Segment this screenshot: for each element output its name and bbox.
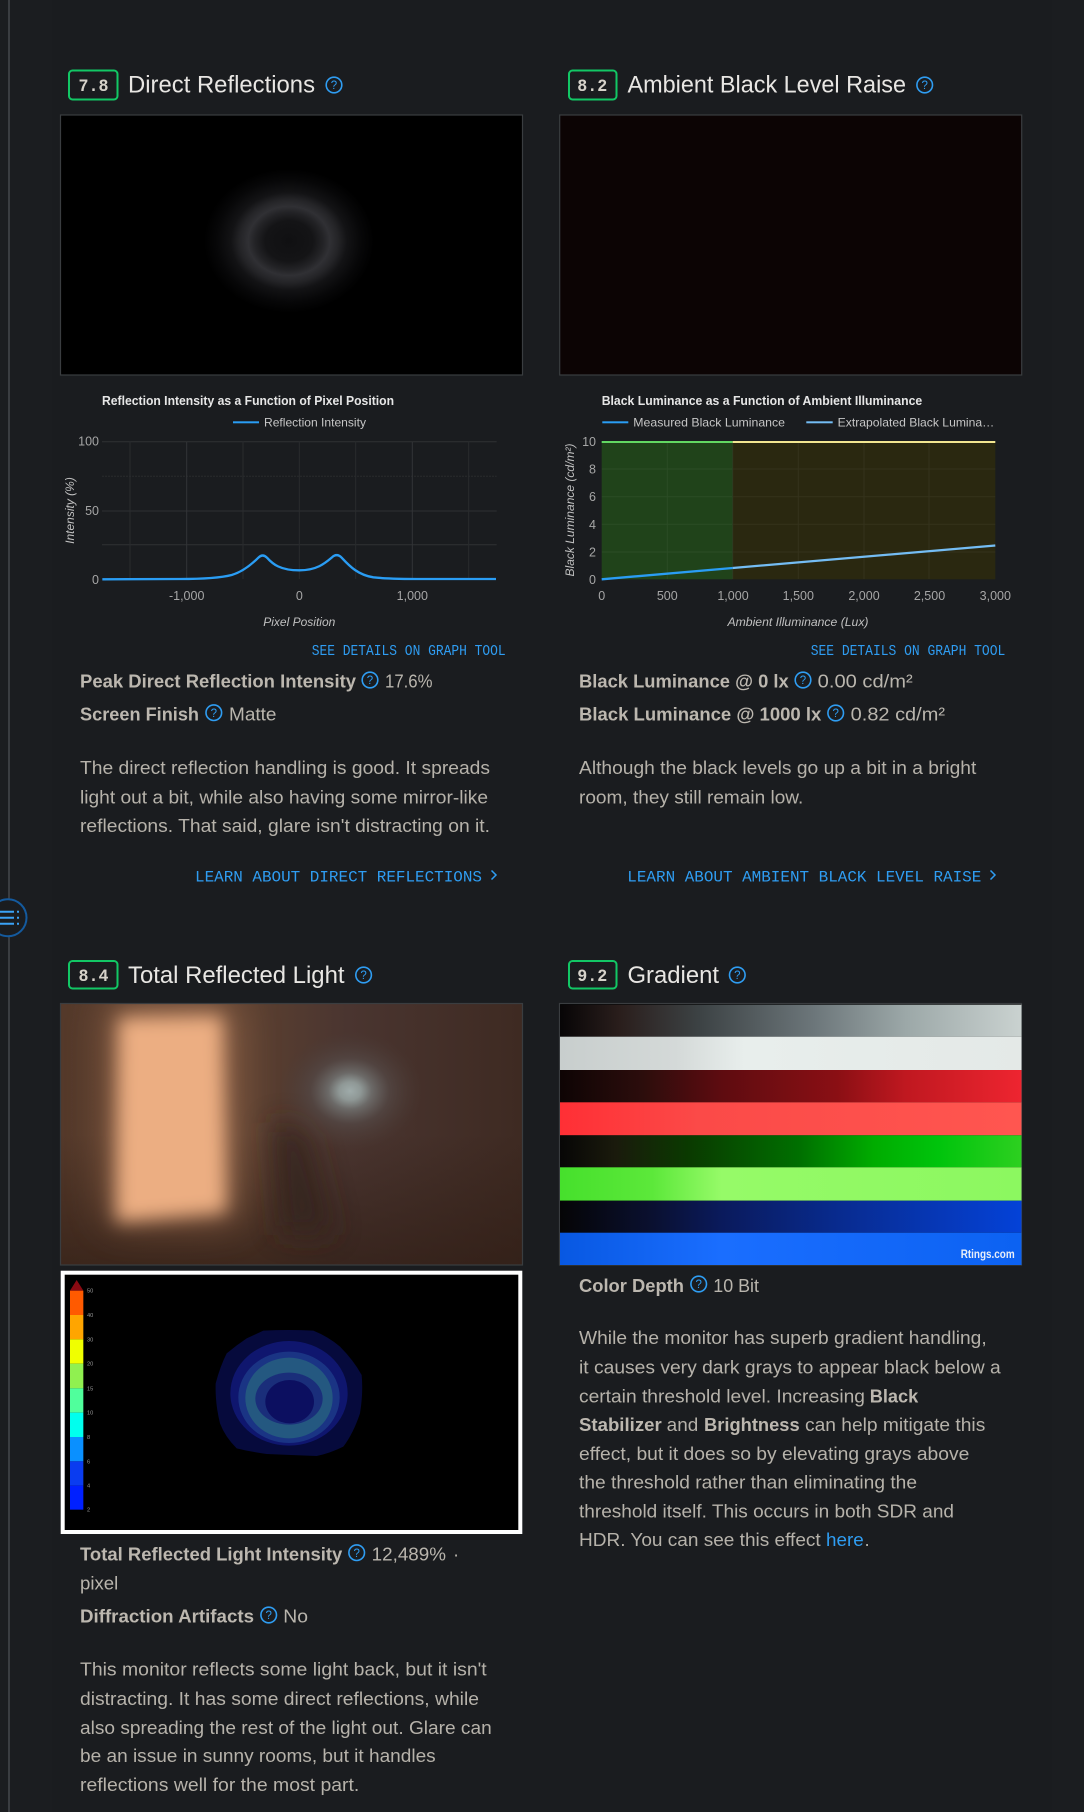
paragraph: total reflected light: This monitor reflects some light back, but it isn't — [80, 1659, 487, 1680]
score badge 9.2 — [569, 961, 616, 988]
stat: black luminance at 0 lx: ? — [800, 675, 806, 687]
panel: gradient — [560, 961, 1022, 1550]
icon: help — [917, 77, 932, 93]
score badge 7.8: 7.8 — [78, 77, 108, 97]
stat: total reflected light intensity — [80, 1544, 459, 1594]
total reflected light photo — [60, 1000, 522, 1265]
heat map contours — [216, 1330, 362, 1456]
stat: screen finish: Screen Finish — [80, 704, 199, 724]
x axis ticks: 3,000 — [980, 589, 1011, 603]
reflection intensity line — [102, 555, 496, 579]
panel: total reflected light — [60, 961, 522, 1795]
watermark: Rtings.com — [961, 1247, 1015, 1261]
stat: peak direct reflection intensity: 17.6% — [385, 670, 432, 692]
score badge 8.2 — [569, 70, 616, 100]
y axis ticks: 8 — [589, 462, 596, 476]
direct reflection photo — [60, 115, 522, 375]
y axis ticks: 0 — [92, 573, 99, 587]
link: learn about ambient black level raise: LEARN ABOUT AMBIENT BLACK LEVEL RAISE — [627, 868, 981, 886]
x axis ticks: 500 — [657, 589, 678, 603]
stat: screen finish — [80, 704, 276, 724]
stat: black luminance at 1000 lx: 0.82 cd/m² — [851, 704, 945, 724]
paragraph: total reflected light — [80, 1659, 492, 1795]
chart legend — [602, 416, 994, 430]
stat: black luminance at 0 lx — [579, 670, 913, 692]
paragraph: ambient black level: room, they still remain low. — [579, 786, 803, 807]
y axis ticks: 50 — [85, 504, 99, 518]
stat: black luminance at 0 lx: 0.00 cd/m² — [818, 670, 913, 692]
x axis ticks — [169, 589, 428, 603]
chart legend: Reflection Intensity — [264, 416, 366, 430]
chart title: Black Luminance as a Function of Ambient Illuminance — [602, 393, 922, 408]
heading: direct reflections — [69, 70, 342, 100]
paragraph: gradient: Black — [870, 1385, 919, 1406]
colour scale bar — [70, 1280, 83, 1510]
title text: Total Reflected Light — [128, 962, 345, 989]
paragraph: direct reflections: The direct reflection handling is good. It spreads — [80, 757, 490, 778]
score badge 8.4 — [69, 961, 118, 988]
paragraph: total reflected light: reflections well for the most part. — [80, 1774, 359, 1795]
y axis ticks: 10 — [582, 435, 596, 449]
y axis title: Intensity (%) — [63, 477, 77, 544]
x axis ticks: 2,000 — [848, 589, 880, 603]
stat: color depth: Color Depth — [579, 1275, 684, 1296]
paragraph: gradient: and — [667, 1414, 698, 1435]
colour scale labels: 10 — [87, 1411, 93, 1417]
paragraph: gradient: threshold itself. This occurs in both SDR and — [579, 1500, 954, 1521]
x axis title: Pixel Position — [263, 615, 336, 629]
heat map — [63, 1273, 520, 1532]
paragraph: gradient: Brightness — [704, 1414, 800, 1435]
x axis ticks: 1,000 — [397, 589, 428, 603]
panel: ambient black level raise — [560, 70, 1022, 886]
sidebar rail — [8, 0, 10, 1812]
stat: color depth: 10 Bit — [713, 1275, 759, 1296]
x axis ticks: 2,500 — [914, 589, 945, 603]
title text: Direct Reflections — [128, 72, 315, 98]
heading: ambient black level raise — [569, 70, 932, 100]
heading: gradient — [569, 961, 745, 989]
icon: help — [356, 967, 371, 983]
paragraph: direct reflections: reflections. That said, glare isn't distracting on it. — [80, 815, 490, 836]
stat: total reflected light intensity: pixel — [80, 1572, 118, 1594]
icon: table of contents menu button — [0, 899, 26, 936]
colour scale labels: 50 — [87, 1289, 93, 1295]
y axis title: Black Luminance (cd/m²) — [563, 444, 577, 576]
icon: help: ? — [331, 80, 337, 92]
panel: direct reflections — [60, 70, 522, 886]
paragraph: gradient — [579, 1327, 1001, 1550]
extrapolated line — [733, 546, 995, 568]
stat: screen finish: Matte — [229, 704, 276, 724]
paragraph: gradient: effect, but it does so by elevating grays above — [579, 1443, 969, 1464]
x axis ticks — [598, 589, 1011, 603]
colour scale labels: 8 — [87, 1435, 90, 1441]
ambient black photo — [560, 115, 1022, 375]
stat: black luminance at 1000 lx: ? — [832, 708, 839, 720]
paragraph: total reflected light: be an issue in sunny rooms, but it handles — [80, 1745, 436, 1766]
y axis ticks: 6 — [589, 490, 596, 504]
x axis title: Ambient Illuminance (Lux) — [726, 615, 868, 629]
paragraph: gradient: HDR. You can see this effect — [579, 1529, 821, 1550]
paragraph: gradient: it causes very dark grays to appear black below a — [579, 1356, 1001, 1377]
x axis ticks: 0 — [296, 589, 303, 603]
stat: color depth: ? — [695, 1279, 702, 1291]
y axis ticks — [582, 435, 596, 587]
paragraph: gradient: While the monitor has superb gradient handling, — [579, 1327, 987, 1348]
link: learn about direct reflections: LEARN ABOUT DIRECT REFLECTIONS — [195, 868, 482, 886]
link: see details on graph tool: SEE DETAILS ON GRAPH TOOL — [312, 644, 506, 660]
stat: peak direct reflection intensity: ? — [367, 675, 373, 687]
paragraph: ambient black level — [579, 757, 976, 807]
y axis ticks: 2 — [589, 546, 596, 560]
colour scale labels: 4 — [87, 1484, 90, 1490]
paragraph: ambient black level: Although the black levels go up a bit in a bright — [579, 757, 976, 778]
stat: total reflected light intensity: · — [453, 1544, 459, 1564]
chart title: Reflection Intensity as a Function of Pixel Position — [102, 393, 394, 408]
score badge 7.8 — [69, 70, 118, 100]
line chart: reflection intensity — [63, 393, 497, 629]
stat: black luminance at 1000 lx: Black Luminance @ 1000 lx — [579, 704, 822, 724]
icon: help — [730, 967, 745, 983]
score badge 9.2: 9.2 — [577, 967, 607, 987]
colour scale labels: 6 — [87, 1459, 90, 1465]
chart legend: Measured Black Luminance — [633, 416, 785, 430]
y axis ticks: 0 — [589, 573, 596, 587]
paragraph: gradient: . — [864, 1529, 870, 1550]
warning zone — [733, 442, 995, 579]
stat: diffraction artifacts: Diffraction Artifacts — [80, 1606, 254, 1626]
title text: Gradient — [628, 962, 719, 989]
icon: help: ? — [921, 80, 928, 92]
stat: diffraction artifacts: No — [283, 1606, 308, 1626]
link: see details on graph tool: SEE DETAILS ON GRAPH TOOL — [811, 644, 1005, 660]
colour scale labels: 20 — [87, 1362, 93, 1368]
stat: screen finish: ? — [211, 708, 217, 720]
stat: total reflected light intensity: Total Reflected Light Intensity — [80, 1544, 343, 1564]
line chart: black luminance — [563, 393, 1011, 629]
paragraph: gradient: here — [826, 1529, 864, 1550]
paragraph: gradient: Stabilizer — [579, 1414, 662, 1435]
stat: color depth — [579, 1275, 759, 1296]
icon: help: ? — [360, 970, 367, 982]
measured line — [602, 568, 733, 579]
colour scale labels — [87, 1289, 93, 1514]
score badge 8.2: 8.2 — [577, 77, 607, 97]
stat: diffraction artifacts: ? — [265, 1610, 272, 1622]
x axis ticks: -1,000 — [169, 589, 204, 603]
paragraph: direct reflections: light out a bit, while also having some mirror-like — [80, 786, 488, 807]
stat: peak direct reflection intensity: Peak Direct Reflection Intensity — [80, 670, 357, 692]
chart legend: Extrapolated Black Lumina… — [838, 416, 994, 430]
icon: help — [326, 77, 342, 93]
heading: total reflected light — [69, 961, 371, 989]
gradient test photo — [560, 1004, 1022, 1265]
x axis ticks: 0 — [598, 589, 605, 603]
colour scale labels: 30 — [87, 1337, 93, 1343]
stat: black luminance at 1000 lx — [579, 704, 945, 724]
y axis ticks: 4 — [589, 518, 596, 532]
colour scale labels: 15 — [87, 1386, 93, 1392]
good zone — [602, 442, 733, 579]
x axis ticks: 1,000 — [717, 589, 749, 603]
score badge 8.4: 8.4 — [78, 967, 108, 987]
y axis ticks: 100 — [78, 434, 99, 448]
zone top edge — [602, 441, 995, 443]
paragraph: gradient: certain threshold level. Increasing — [579, 1385, 865, 1406]
colour scale labels: 2 — [87, 1508, 90, 1514]
paragraph: gradient: the threshold rather than eliminating the — [579, 1471, 917, 1492]
stat: total reflected light intensity: ? — [353, 1548, 360, 1560]
colour scale labels: 40 — [87, 1313, 93, 1319]
paragraph: direct reflections — [80, 757, 490, 836]
paragraph: total reflected light: also spreading the rest of the light out. Glare can — [80, 1717, 492, 1738]
stat: total reflected light intensity: 12,489% — [372, 1544, 446, 1564]
icon: help: ? — [734, 970, 741, 982]
paragraph: total reflected light: distracting. It has some direct reflections, while — [80, 1688, 479, 1709]
stat: black luminance at 0 lx: Black Luminance @ 0 lx — [579, 670, 789, 692]
paragraph: gradient: can help mitigate this — [805, 1414, 985, 1435]
y axis ticks — [78, 434, 99, 587]
x axis ticks: 1,500 — [783, 589, 814, 603]
title text: Ambient Black Level Raise — [628, 72, 906, 98]
